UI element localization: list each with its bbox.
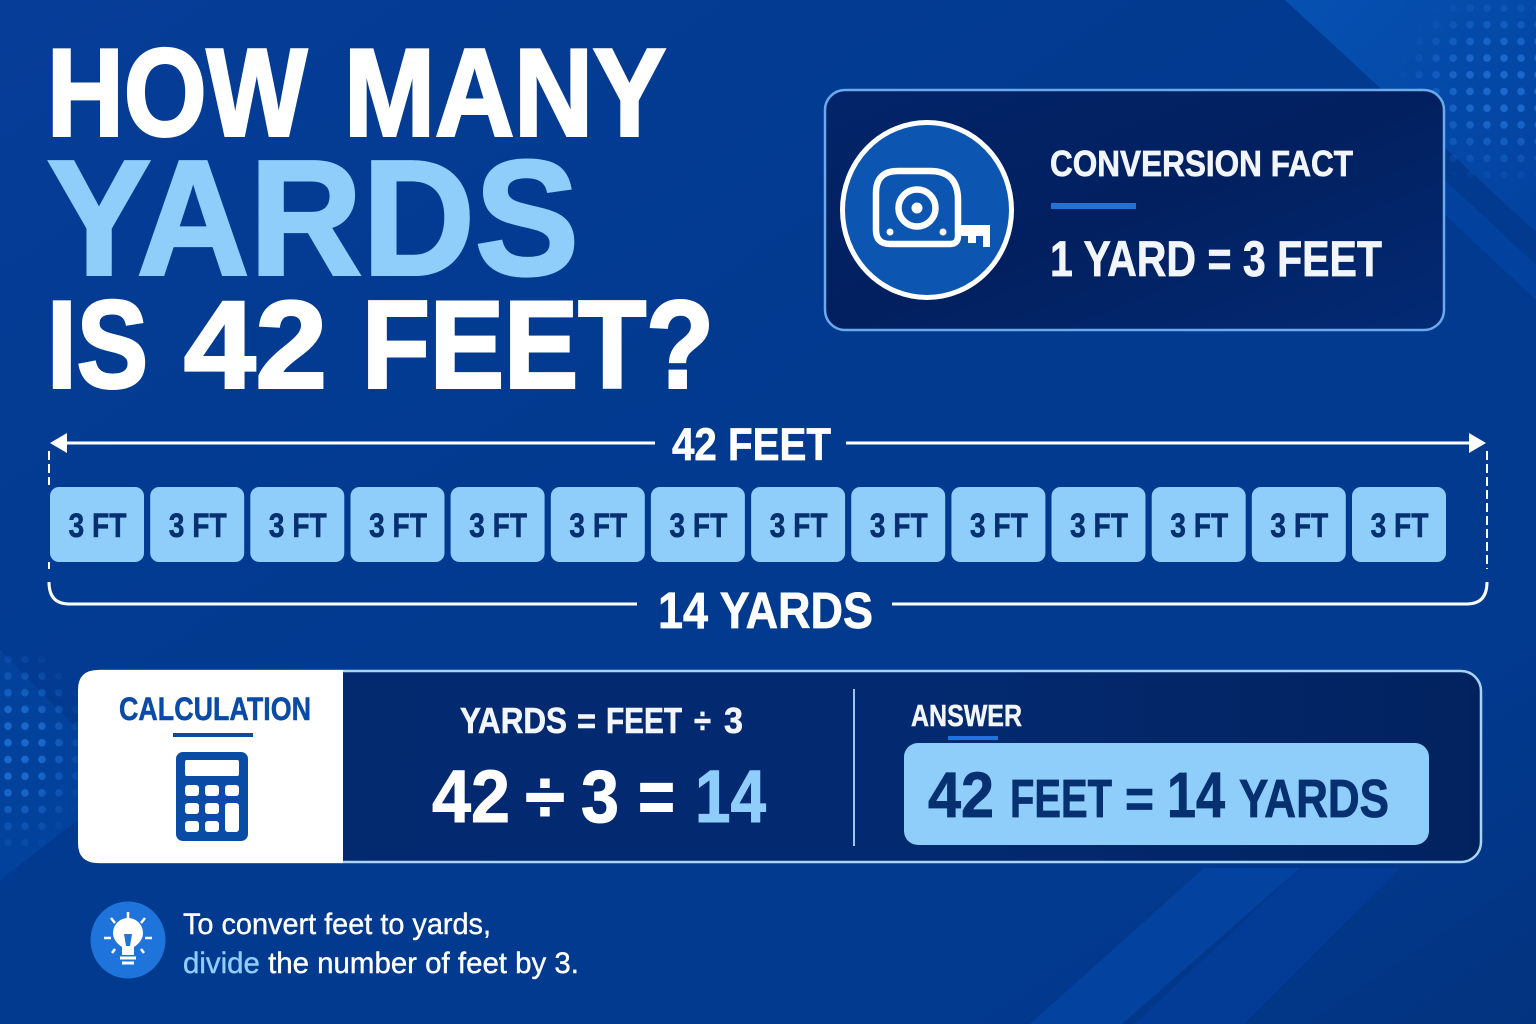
calculation result: [432, 755, 766, 838]
label: 14 yards: 14 YARDS: [658, 582, 873, 639]
calculation result: =: [638, 755, 675, 838]
bracket: 14 yards span: [49, 582, 1487, 604]
formula: [460, 700, 743, 741]
title: [47, 24, 714, 414]
tip text: [183, 908, 579, 980]
answer box: [904, 743, 1429, 845]
tiles: 3 ft segments: [50, 487, 1446, 562]
conversion value: 1 YARD = 3 FEET: [1050, 231, 1382, 287]
calculation result: 3: [581, 755, 619, 838]
title: IS: [47, 276, 148, 414]
tiles: 3 ft segments: 3 FT: [1170, 507, 1228, 545]
formula: YARDS: [460, 700, 567, 741]
tiles: 3 ft segments: 3 FT: [1370, 507, 1429, 545]
tiles: 3 ft segments: 3 FT: [1070, 507, 1128, 545]
answer label: ANSWER: [911, 698, 1022, 733]
tiles: 3 ft segments: 3 FT: [269, 507, 327, 545]
arrow: 42 feet span: [49, 433, 1487, 569]
tiles: 3 ft segments: 3 FT: [469, 507, 527, 545]
formula: 3: [724, 700, 743, 741]
calculation label card: CALCULATION: [119, 691, 311, 727]
tip text: To convert feet to yards,: [183, 908, 491, 941]
tiles: 3 ft segments: 3 FT: [870, 507, 928, 545]
answer box: =: [1125, 769, 1154, 829]
tip text: divide the number of feet by 3.: [183, 947, 579, 980]
answer box: FEET: [1010, 769, 1112, 829]
formula: =: [577, 700, 596, 741]
tiles: 3 ft segments: 3 FT: [569, 507, 627, 545]
divider: [853, 689, 855, 846]
answer box: 14: [1167, 759, 1225, 831]
tiles: 3 ft segments: 3 FT: [669, 507, 728, 545]
accent rule: [1051, 203, 1136, 209]
title: MANY: [344, 24, 666, 162]
calculation label card: [78, 670, 343, 863]
calculation result: ÷: [525, 755, 565, 838]
tiles: 3 ft segments: 3 FT: [369, 507, 427, 545]
calculation result: 42: [432, 755, 510, 838]
label: 42 feet: 42 FEET: [672, 419, 831, 470]
icon: tape measure: [842, 122, 1012, 298]
title: HOW: [47, 24, 307, 162]
icon: light bulb: [90, 902, 166, 978]
formula: FEET: [606, 700, 682, 741]
title: YARDS: [47, 126, 579, 310]
answer box: 42: [928, 759, 994, 831]
tiles: 3 ft segments: 3 FT: [770, 507, 828, 545]
conversion heading: CONVERSION FACT: [1050, 143, 1353, 184]
tiles: 3 ft segments: 3 FT: [68, 507, 127, 545]
title: FEET?: [362, 276, 714, 414]
tiles: 3 ft segments: 3 FT: [1270, 507, 1328, 545]
title: 42: [184, 276, 327, 414]
formula: ÷: [694, 700, 711, 741]
tiles: 3 ft segments: 3 FT: [169, 507, 227, 545]
panel: conversion fact: [825, 90, 1444, 330]
calculation result: 14: [695, 755, 766, 838]
panel: calculation: [78, 670, 1481, 863]
icon: calculator: [176, 752, 248, 841]
tiles: 3 ft segments: 3 FT: [970, 507, 1028, 545]
answer box: YARDS: [1239, 769, 1389, 829]
